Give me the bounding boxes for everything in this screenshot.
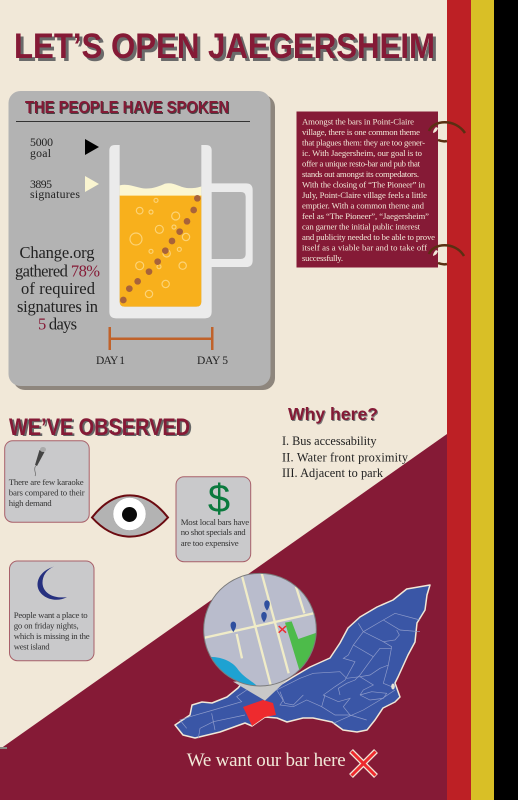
icon: dollar sign: $ bbox=[208, 477, 230, 521]
list: reasons bbox=[282, 434, 409, 480]
beer bbox=[120, 195, 201, 307]
stripes: red, yellow, black bbox=[447, 0, 518, 800]
icon: microphone bbox=[35, 447, 46, 476]
description paragraph: With the closing of “The Pioneer” in bbox=[302, 180, 426, 190]
location pins bbox=[231, 600, 270, 632]
callout: change.org statistic: gathered 78% bbox=[15, 262, 100, 280]
goal label bbox=[30, 135, 99, 160]
description paragraph: offer a unique resto-bar and pub that bbox=[302, 158, 421, 168]
friday nights text bbox=[14, 610, 90, 652]
icon: binder ring bottom bbox=[429, 245, 464, 264]
karaoke text: high demand bbox=[9, 498, 52, 508]
heading: we've observed: WE’VE OBSERVED bbox=[9, 414, 190, 441]
proposed site marker bbox=[279, 626, 286, 633]
panel heading: THE PEOPLE HAVE SPOKEN bbox=[25, 97, 229, 117]
prices text bbox=[181, 517, 249, 548]
maroon diagonal background bbox=[0, 434, 447, 800]
panel: description text bbox=[296, 112, 438, 268]
description paragraph: can garner the initial public interest bbox=[302, 222, 421, 232]
description paragraph: and publicity needed to be able to prove bbox=[302, 232, 435, 242]
list: reasons: III. Adjacent to park bbox=[282, 466, 384, 480]
mug handle bbox=[210, 183, 253, 267]
callout: change.org statistic: signatures in bbox=[17, 297, 98, 316]
karaoke text: bars compared to their bbox=[9, 488, 85, 498]
prices text: Most local bars have bbox=[181, 517, 249, 527]
prices text: are too expensive bbox=[181, 538, 239, 548]
prices text: no shot specials and bbox=[181, 527, 246, 537]
callout: change.org statistic bbox=[15, 243, 100, 334]
day labels bbox=[96, 355, 228, 367]
friday nights text: west island bbox=[14, 642, 50, 652]
friday nights text: which is missing in the bbox=[14, 631, 90, 641]
description paragraph: feel as “The Pioneer”, “Jaegersheim” bbox=[302, 211, 429, 221]
description paragraph: Amongst the bars in Point-Claire bbox=[302, 116, 414, 126]
description paragraph bbox=[302, 116, 435, 263]
callout: change.org statistic: 5 days bbox=[38, 314, 77, 334]
callout: change.org statistic: Change.org bbox=[20, 243, 94, 262]
park bbox=[285, 621, 317, 670]
foam bbox=[120, 183, 201, 196]
day labels: DAY 5 bbox=[197, 355, 228, 367]
signature trend dots bbox=[120, 195, 201, 303]
signatures label: signatures bbox=[30, 187, 80, 201]
map caption: We want our bar here bbox=[187, 750, 346, 771]
card: karaoke bbox=[5, 441, 89, 522]
signatures label: 3895 bbox=[30, 177, 52, 191]
island shape bbox=[175, 585, 430, 738]
description paragraph: that plagues them: they are too gener- bbox=[302, 138, 425, 148]
day labels: DAY 1 bbox=[96, 355, 125, 367]
timeline bracket bbox=[108, 327, 214, 350]
icon: eye bbox=[92, 495, 168, 537]
mug glass bbox=[109, 145, 212, 318]
icon: binder ring top bbox=[429, 122, 465, 141]
water bbox=[211, 656, 256, 686]
signatures label bbox=[30, 176, 99, 201]
panel background bbox=[8, 91, 275, 390]
panel: the people have spoken bbox=[8, 91, 275, 390]
goal label: 5000 bbox=[30, 135, 53, 149]
magnifier pointer bbox=[233, 680, 287, 701]
chart: beer mug bbox=[109, 145, 253, 318]
friday nights text: People want a place to bbox=[14, 610, 88, 620]
icon: moon bbox=[38, 566, 67, 600]
icon: red x marker bbox=[351, 751, 376, 776]
magnifier: street map bbox=[203, 573, 317, 687]
description paragraph: July, Point-Claire village feels a little bbox=[302, 190, 427, 200]
heading: why here: Why here? bbox=[288, 404, 378, 424]
borough lines west bbox=[180, 690, 247, 738]
highlighted borough bbox=[243, 700, 276, 726]
friday nights text: go on friday nights, bbox=[14, 620, 79, 630]
description paragraph: village, there is one common theme bbox=[302, 127, 420, 137]
bubbles bbox=[130, 198, 190, 298]
card: prices bbox=[176, 477, 251, 562]
borough lines east bbox=[277, 613, 420, 723]
description paragraph: stands out amongst its compedators. bbox=[302, 169, 419, 179]
title: LET’S OPEN JAEGERSHEIM bbox=[14, 27, 435, 66]
white lake marker bbox=[391, 684, 395, 690]
list: reasons: I. Bus accessability bbox=[282, 434, 377, 448]
karaoke text bbox=[9, 477, 85, 508]
description paragraph: ic. With Jaegersheim, our goal is to bbox=[302, 148, 423, 158]
karaoke text: There are few karaoke bbox=[9, 477, 84, 487]
description paragraph: successfully. bbox=[302, 253, 343, 263]
description paragraph: emptier. With a common theme and bbox=[302, 200, 425, 210]
callout: change.org statistic: of required bbox=[21, 279, 96, 298]
list: reasons: II. Water front proximity bbox=[282, 450, 409, 464]
description paragraph: itself as a viable bar and to take off bbox=[302, 242, 427, 252]
magnifier bbox=[203, 573, 317, 701]
streets bbox=[203, 573, 317, 685]
card: friday nights bbox=[10, 561, 94, 661]
map: island of Montreal bbox=[175, 585, 430, 738]
goal label: goal bbox=[30, 146, 52, 160]
